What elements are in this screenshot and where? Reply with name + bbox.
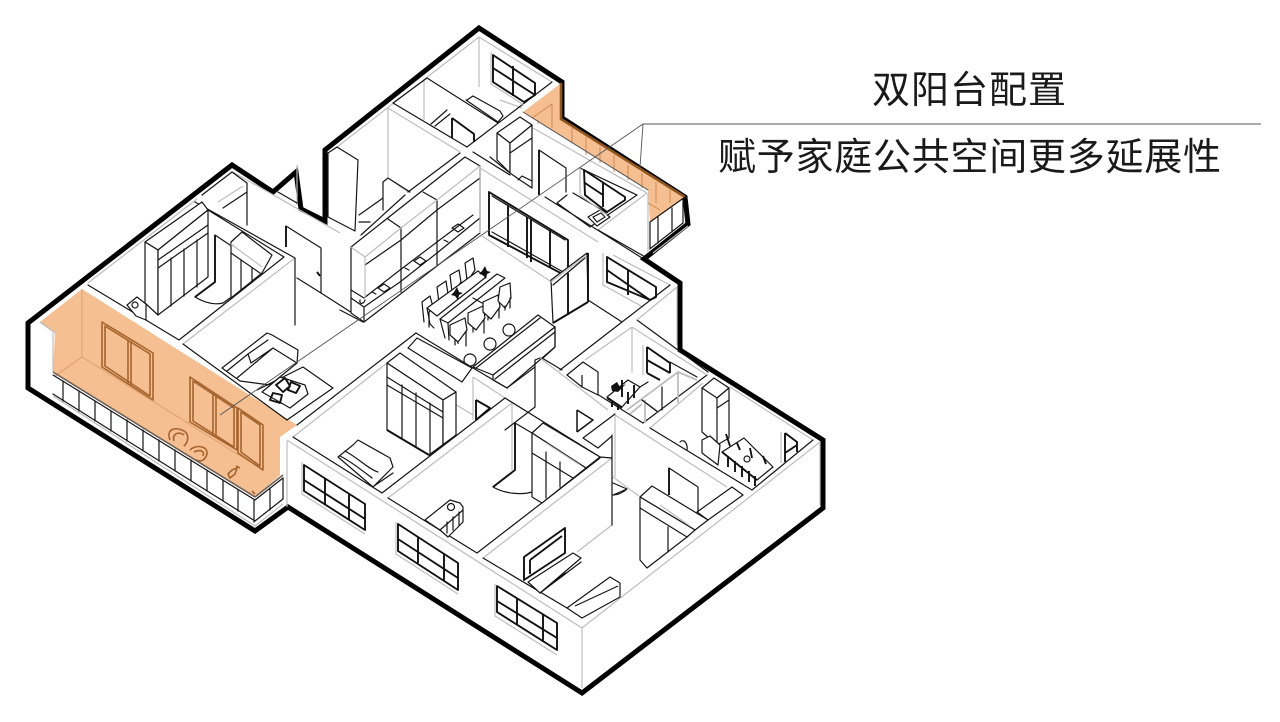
front row chairs <box>450 283 511 346</box>
right balcony railing <box>650 197 688 253</box>
small door top room <box>431 110 474 142</box>
left balcony orange highlight <box>40 289 297 497</box>
bedroom three bed <box>567 577 620 618</box>
dining table with chairs <box>422 258 511 346</box>
top room walls <box>337 37 552 192</box>
left bedroom door and second wardrobe <box>195 232 272 304</box>
nightstand with lamp <box>127 297 146 320</box>
top right door <box>539 150 566 195</box>
living room walls <box>88 165 416 425</box>
left bedroom wardrobe <box>145 202 208 315</box>
table flowers <box>451 266 491 300</box>
bedroom three ensuite door and wardrobe <box>613 468 708 568</box>
double vanity <box>702 434 773 486</box>
exterior windows front wall <box>302 462 557 655</box>
balcony doors <box>102 322 263 470</box>
upper cabinets and counter <box>351 157 480 322</box>
top room window <box>491 52 535 105</box>
window A <box>302 462 365 534</box>
back row chairs <box>422 258 475 327</box>
top right room walls <box>473 128 648 258</box>
central corridor walls <box>480 166 598 283</box>
subtitle: 赋予家庭公共空间更多延展性 <box>718 137 1222 179</box>
mid right window <box>603 253 670 307</box>
hallway walls <box>542 285 708 372</box>
bedroom one walls <box>293 333 608 553</box>
right bathroom walls <box>615 383 820 520</box>
title: 双阳台配置 <box>872 70 1067 112</box>
right balcony orange highlight <box>523 83 685 222</box>
rug and coffee table <box>257 367 333 420</box>
room behind kitchen <box>359 178 410 235</box>
window B <box>396 522 458 594</box>
shower enclosure <box>627 372 697 423</box>
kitchen island with stools <box>464 315 555 388</box>
bedroom two door and wardrobe <box>493 423 600 503</box>
leader line <box>220 124 1261 415</box>
top right bathroom window <box>580 168 625 215</box>
bedroom three tv and console <box>524 528 581 593</box>
top right bathtub <box>573 193 610 226</box>
top room bed <box>466 96 503 122</box>
small door bedroom one <box>476 400 490 420</box>
left balcony railing <box>40 322 283 526</box>
bedroom three walls <box>287 414 820 688</box>
sliding glass doors <box>489 192 568 277</box>
bedroom two desk <box>425 500 463 537</box>
right bathroom window <box>785 433 797 462</box>
laundry and vanity <box>607 380 640 410</box>
utility cabinet <box>567 362 598 395</box>
closet behind wardrobe <box>202 172 247 225</box>
tall cabinet right bathroom <box>680 378 729 450</box>
sofa <box>222 333 298 385</box>
open folding door <box>551 253 588 323</box>
window C <box>495 584 557 655</box>
bathroom window <box>643 345 697 380</box>
exterior wall outline <box>28 28 823 693</box>
balcony chairs <box>169 429 255 494</box>
tall column <box>328 147 358 231</box>
bedroom one wardrobe <box>387 353 456 455</box>
bathroom left room walls <box>567 327 707 432</box>
bedroom one bed <box>338 440 393 487</box>
top right refrigerator <box>497 117 532 188</box>
back door <box>286 226 321 293</box>
